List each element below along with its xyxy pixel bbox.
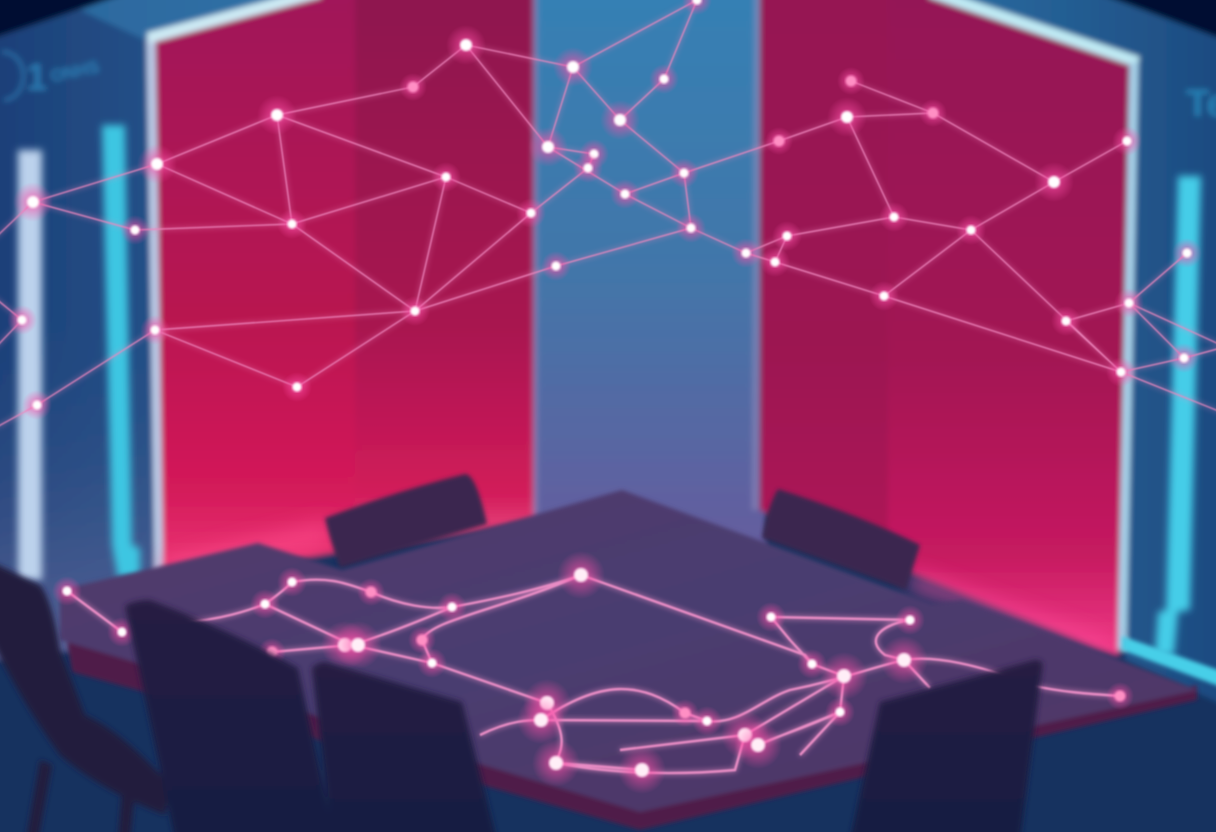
wall network nodes: [7, 0, 1202, 420]
left wall: [0, 0, 330, 660]
dark ceiling corner right: [1095, 0, 1216, 40]
light edge left panel: [151, 38, 159, 575]
wall network lines: [0, 0, 1216, 428]
wall icon arc left: [2, 52, 23, 100]
neon bars: [18, 125, 1216, 688]
center blue panel: [530, 0, 765, 552]
top strip above left panel: [80, 0, 330, 42]
cyan bar right: [1155, 176, 1201, 655]
chair far left: [0, 562, 170, 832]
chair front left: [125, 600, 335, 832]
foreground chairs: [0, 562, 1043, 832]
table edge: [60, 595, 1197, 830]
table network traces: [67, 575, 1120, 773]
chair front center: [312, 662, 497, 832]
dark ceiling corner left: [0, 0, 130, 38]
white bar left: [18, 150, 42, 580]
wall label left: 1: [26, 57, 47, 99]
cyan bar left: [102, 125, 140, 578]
chair front right: [850, 660, 1043, 832]
table network nodes: [52, 551, 1134, 794]
wall label left small: ONHS: [49, 57, 101, 86]
pink glow under panels: [165, 520, 1110, 655]
chair back right: [762, 489, 920, 590]
right wall: [925, 0, 1216, 705]
chair back left: [325, 474, 487, 568]
cyan floor glow right: [1122, 636, 1216, 688]
red panel right: [760, 0, 1132, 655]
light edge right panel: [930, 0, 1138, 62]
table: [60, 490, 1198, 830]
red panel left: [152, 0, 535, 580]
table top: [60, 490, 1198, 812]
